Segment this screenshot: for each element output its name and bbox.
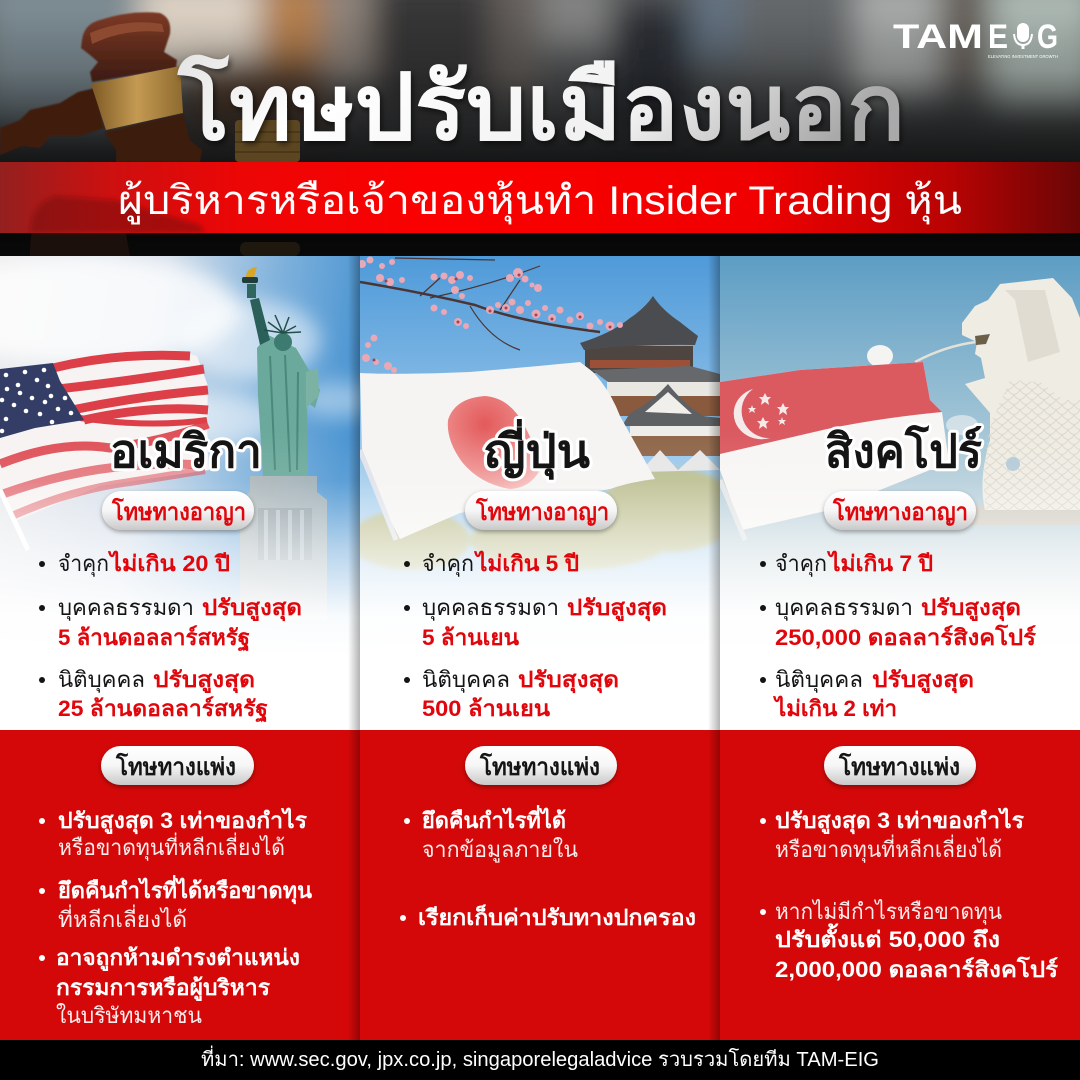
criminal list USA: นิติบุคคล (58, 667, 145, 693)
red subtitle band (0, 162, 1080, 233)
pill: civil penalty Japan (465, 746, 617, 785)
coin stack (235, 120, 300, 256)
criminal list Singapore: ไม่เกิน 2 เท่า (773, 695, 897, 721)
panel: Japan photo (360, 256, 720, 622)
criminal list Singapore: ปรับสูงสุด (872, 667, 974, 694)
icon: Singapore flag (720, 362, 950, 540)
pill: civil penalty USA (101, 746, 254, 785)
criminal list USA: บุคคลธรรมดา (58, 595, 194, 621)
criminal list USA (39, 550, 302, 723)
heading: Japan: ญี่ปุ่น (484, 419, 591, 480)
icon: japanese castle (580, 296, 720, 472)
footer source bar: ที่มา: www.sec.gov, jpx.co.jp, singaporelegaladvice รวบรวมโดยทีม TAM-EIG (201, 1045, 879, 1071)
civil list Singapore: ปรับสูงสุด 3 เท่าของกำไร (775, 807, 1024, 835)
logo: TAM EIG: TAM (893, 18, 983, 56)
criminal list USA: 25 ล้านดอลลาร์สหรัฐ (58, 696, 268, 723)
civil list USA: กรรมการหรือผู้บริหาร (56, 975, 270, 1002)
criminal list Singapore: นิติบุคคล (775, 667, 863, 693)
criminal list Japan: 500 ล้านเยน (422, 696, 550, 721)
pill: criminal penalty Singapore (824, 491, 976, 530)
header: blurred courtroom photo with gavel (0, 0, 1080, 256)
heading: Singapore: สิงคโปร์ (825, 424, 982, 477)
civil list USA: ในบริษัทมหาชน (56, 1003, 202, 1028)
civil list USA: ยึดคืนกำไรที่ได้หรือขาดทุน (58, 874, 312, 905)
civil list Japan: จากข้อมูลภายใน (422, 837, 578, 863)
subtitle: ผู้บริหารหรือเจ้าของหุ้นทำ Insider Trading หุ้น (118, 179, 962, 225)
criminal list USA: 5 ล้านดอลลาร์สหรัฐ (58, 625, 250, 652)
criminal list USA: ปรับสูงสุด (153, 667, 255, 694)
criminal list Japan: ไม่เกิน 5 ปี (474, 550, 579, 576)
civil list USA: หรือขาดทุนที่หลีกเลี่ยงได้ (58, 832, 285, 861)
criminal list Singapore: จำคุก (775, 551, 827, 577)
red civil penalty strip (0, 730, 1080, 1040)
column: Singapore text (760, 424, 1058, 982)
criminal list USA: ไม่เกิน 20 ปี (108, 550, 230, 576)
pill: civil penalty Singapore (824, 746, 976, 785)
panel: Singapore photo (720, 256, 1080, 620)
civil list Singapore: หรือขาดทุนที่หลีกเลี่ยงได้ (775, 834, 1002, 863)
icon: cherry blossom branch (358, 256, 623, 373)
criminal list Japan: จำคุก (422, 551, 474, 577)
pill: civil penalty Japan: โทษทางแพ่ง (479, 752, 600, 781)
white fade over photos (0, 430, 1080, 730)
title: โทษปรับเมืองนอก (177, 54, 905, 159)
icon: merlion (915, 278, 1080, 525)
criminal list Singapore (760, 550, 1036, 721)
icon: Japan flag (360, 362, 655, 540)
criminal list Singapore: ปรับสูงสุด (921, 595, 1021, 622)
civil list Singapore: 2,000,000 ดอลลาร์สิงคโปร์ (775, 956, 1058, 982)
criminal list Singapore: ไม่เกิน 7 ปี (827, 550, 933, 576)
logo: TAM EIG: E (988, 18, 1008, 56)
civil list Singapore: หากไม่มีกำไรหรือขาดทุน (775, 899, 1002, 925)
column: Japan text (400, 419, 696, 930)
civil list USA: ที่หลีกเลี่ยงได้ (58, 904, 187, 932)
pill: criminal penalty USA: โทษทางอาญา (111, 497, 246, 526)
pill: criminal penalty Japan: โทษทางอาญา (475, 497, 609, 526)
heading: USA: อเมริกา (110, 425, 262, 477)
icon: US flag (0, 349, 209, 550)
criminal list Japan (404, 550, 667, 721)
criminal list Japan: บุคคลธรรมดา (422, 595, 559, 621)
civil list USA: ปรับสูงสุด 3 เท่าของกำไร (58, 807, 307, 835)
panel: USA photo (0, 256, 360, 620)
column: USA text (39, 425, 312, 1028)
logo: TAM EIG: G (1037, 18, 1058, 56)
criminal list Japan: 5 ล้านเยน (422, 625, 519, 650)
pill: civil penalty Singapore: โทษทางแพ่ง (838, 752, 960, 781)
trees (350, 468, 740, 570)
criminal list Singapore: บุคคลธรรมดา (775, 595, 913, 621)
pill: criminal penalty Japan (465, 491, 617, 530)
criminal list Japan: ปรับสูงสุด (567, 595, 667, 622)
column shadows (348, 256, 720, 1040)
criminal list Japan: ปรับสุงสุด (518, 667, 619, 694)
pill: criminal penalty USA (102, 491, 254, 530)
icon: gavel (0, 12, 202, 256)
clouds (867, 345, 978, 435)
criminal list Japan: นิติบุคคล (422, 667, 510, 693)
civil list Japan: ยึดคืนกำไรที่ได้ (422, 804, 566, 833)
criminal list Singapore: 250,000 ดอลลาร์สิงคโปร์ (775, 624, 1036, 650)
civil list USA (39, 807, 312, 1028)
criminal list USA: ปรับสูงสุด (202, 595, 302, 622)
civil list USA: อาจถูกห้ามดำรงตำแหน่ง (56, 945, 300, 972)
footer source bar (0, 1040, 1080, 1080)
pill: civil penalty USA: โทษทางแพ่ง (115, 752, 236, 781)
civil list Singapore (760, 807, 1058, 982)
logo: TAM EIG: ELEVATING INVESTMENT GROWTH (988, 54, 1058, 59)
pill: criminal penalty Singapore: โทษทางอาญา (832, 497, 968, 526)
criminal list USA: จำคุก (58, 551, 109, 577)
civil list Japan: เรียกเก็บค่าปรับทางปกครอง (418, 903, 696, 930)
icon: statue of liberty (240, 267, 327, 620)
civil list Japan (400, 804, 696, 930)
logo: TAM EIG (893, 18, 1058, 59)
civil list Singapore: ปรับตั้งแต่ 50,000 ถึง (775, 923, 1000, 952)
